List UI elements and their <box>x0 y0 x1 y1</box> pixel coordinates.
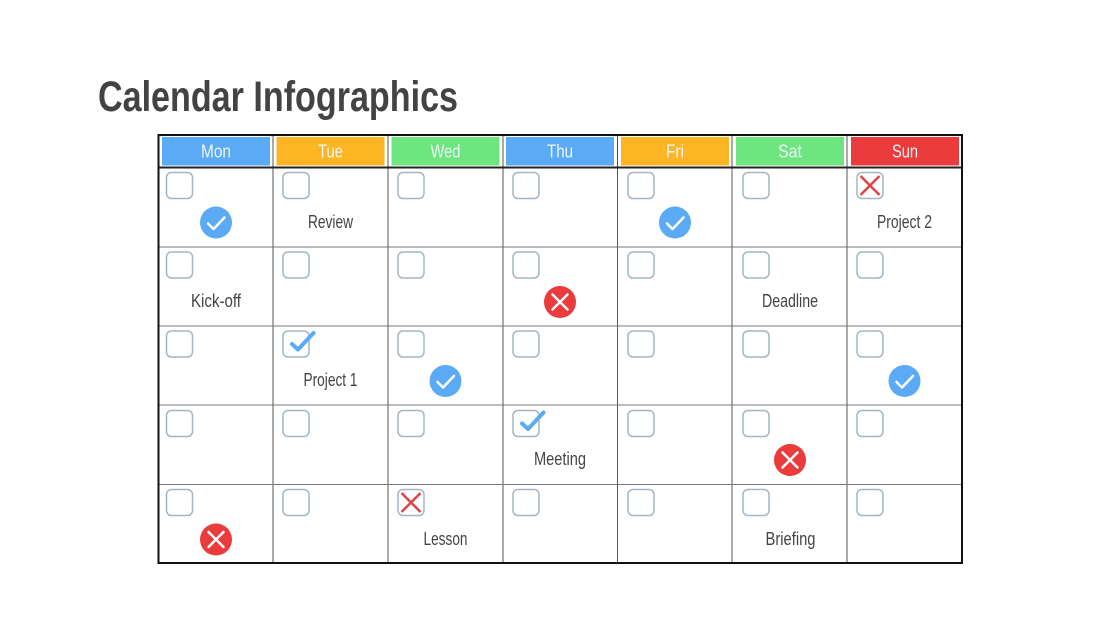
icon: red cross Thu row 2 <box>544 286 576 318</box>
label: Meeting: Meeting <box>534 449 586 469</box>
header: days of the week <box>162 137 959 166</box>
checkboxes <box>166 172 883 516</box>
label: Deadline: Deadline <box>762 291 818 311</box>
icon: red cross Sat row 4 <box>774 444 806 476</box>
icon: blue check Mon row 1 <box>200 206 232 238</box>
grid lines <box>158 135 962 563</box>
Tuesday header: Tue <box>318 142 343 162</box>
icon: red cross Mon row 5 <box>200 524 232 556</box>
label: Project 2: Project 2 <box>877 212 932 232</box>
title: Calendar Infographics <box>98 73 458 121</box>
Saturday header <box>736 137 844 166</box>
icon: ticked box Tue row 3 <box>292 333 314 350</box>
Monday header: Mon <box>201 142 231 162</box>
label: Briefing: Briefing <box>766 529 816 549</box>
Thursday header: Thu <box>547 142 573 162</box>
Monday header <box>162 137 270 166</box>
label: Kick-off: Kick-off <box>191 291 242 311</box>
label: Review: Review <box>308 212 354 232</box>
Tuesday header <box>276 137 384 166</box>
Friday header <box>621 137 729 166</box>
icon: crossed box Wed row 5 <box>402 493 420 512</box>
icon: ticked box Thu row 4 <box>522 412 544 429</box>
Friday header: Fri <box>666 142 684 162</box>
icon: blue check Wed row 3 <box>430 365 462 397</box>
icon: blue check Sun row 3 <box>888 365 920 397</box>
label: Project 1: Project 1 <box>304 370 358 390</box>
label: Lesson: Lesson <box>424 529 468 549</box>
calendar <box>158 135 962 563</box>
Thursday header <box>506 137 614 166</box>
Wednesday header <box>392 137 500 166</box>
Wednesday header: Wed <box>430 142 460 162</box>
icon: crossed box Sun row 1 <box>860 176 880 195</box>
Sunday header: Sun <box>892 142 918 162</box>
Saturday header: Sat <box>778 142 802 162</box>
Sunday header <box>851 137 959 166</box>
icon: blue check Fri row 1 <box>659 206 691 238</box>
